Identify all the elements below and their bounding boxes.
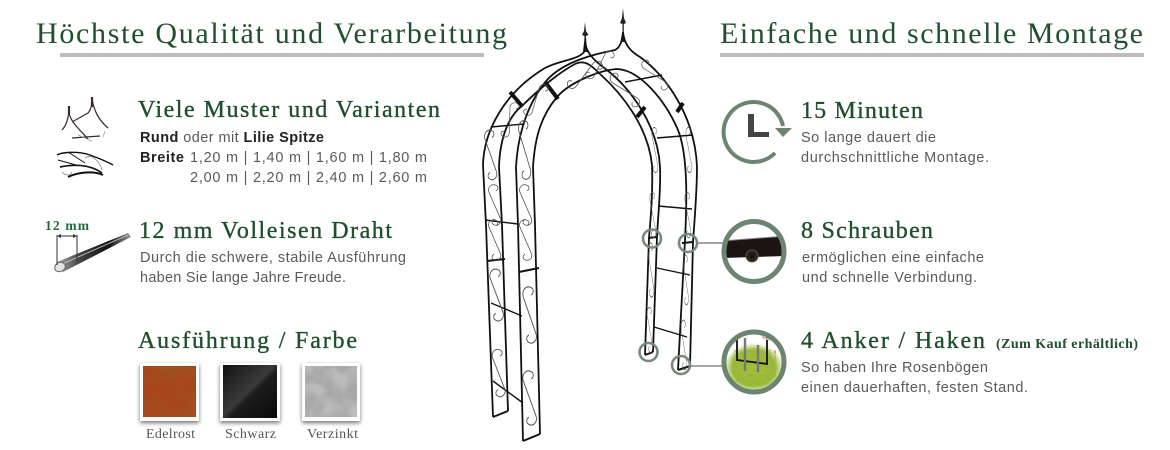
text: montage line one: So lange dauert die bbox=[801, 130, 936, 146]
text: Rund oder mit Lilie Spitze: Rund oder mit Lilie Spitze bbox=[140, 130, 324, 146]
heading: Einfache und schnelle Montage: Einfache und schnelle Montage bbox=[720, 17, 1143, 50]
text: montage line two: durchschnittliche Montage. bbox=[801, 150, 989, 166]
subheading: 8 Schrauben: 8 Schrauben bbox=[801, 218, 933, 244]
swatch: Verzinkt bbox=[302, 363, 360, 421]
icon: anchor detail bbox=[722, 330, 786, 394]
label: Schwarz: Schwarz bbox=[225, 427, 276, 442]
note: Zum Kauf erhältlich: (Zum Kauf erhältlich) bbox=[996, 337, 1138, 352]
thick connectors bbox=[510, 82, 683, 117]
heading rule left bbox=[60, 53, 484, 57]
crossbars bbox=[485, 75, 693, 441]
icon: clock bbox=[724, 102, 792, 162]
icon: 12 mm rod bbox=[45, 218, 131, 273]
text: Breite label: Breite bbox=[140, 150, 184, 166]
text: widths row one: 1,20 m | 1,40 m | 1,60 m | 1,80 m bbox=[190, 150, 427, 166]
text: anchors line two: einen dauerhaften, festen Stand. bbox=[801, 380, 1028, 396]
connector to anchor detail bbox=[691, 365, 723, 367]
marker rings bbox=[640, 230, 697, 374]
subheading: Ausführung / Farbe: Ausführung / Farbe bbox=[138, 328, 357, 354]
subheading: 15 Minuten: 15 Minuten bbox=[801, 98, 923, 124]
subheading: 12 mm Volleisen Draht: 12 mm Volleisen Draht bbox=[139, 218, 392, 244]
label: Verzinkt: Verzinkt bbox=[307, 427, 358, 442]
label: Edelrost: Edelrost bbox=[146, 427, 195, 442]
swatch: Schwarz bbox=[220, 363, 280, 421]
rose arch illustration bbox=[483, 8, 697, 441]
subheading: Viele Muster und Varianten: Viele Muster und Varianten bbox=[138, 97, 440, 123]
spire right bbox=[620, 8, 626, 42]
swatch: Edelrost bbox=[140, 363, 199, 421]
text: wire line two: haben Sie lange Jahre Freude. bbox=[140, 270, 346, 286]
subheading: 4 Anker / Haken: 4 Anker / Haken bbox=[801, 328, 985, 354]
icon: 12 mm rod: 12 mm bbox=[45, 218, 90, 233]
spire left bbox=[582, 22, 588, 52]
icon: round arch top bbox=[57, 152, 113, 177]
text: screws line two: und schnelle Verbindung. bbox=[802, 270, 977, 286]
connector to screw detail bbox=[698, 242, 723, 244]
text: screws line one: ermöglichen eine einfache bbox=[802, 250, 984, 266]
heading: Höchste Qualität und Verarbeitung: Höchste Qualität und Verarbeitung bbox=[36, 17, 507, 50]
text: widths row two: 2,00 m | 2,20 m | 2,40 m | 2,60 m bbox=[190, 170, 427, 186]
arch rails bbox=[483, 32, 697, 441]
icon: arch tops with lily spire bbox=[62, 97, 108, 141]
text: wire line one: Durch die schwere, stabile Ausführung bbox=[140, 250, 406, 266]
icon: screw detail bbox=[722, 222, 786, 282]
scroll ornaments bbox=[485, 49, 692, 425]
heading rule right bbox=[720, 53, 1144, 57]
text: anchors line one: So haben Ihre Rosenbögen bbox=[801, 360, 988, 376]
